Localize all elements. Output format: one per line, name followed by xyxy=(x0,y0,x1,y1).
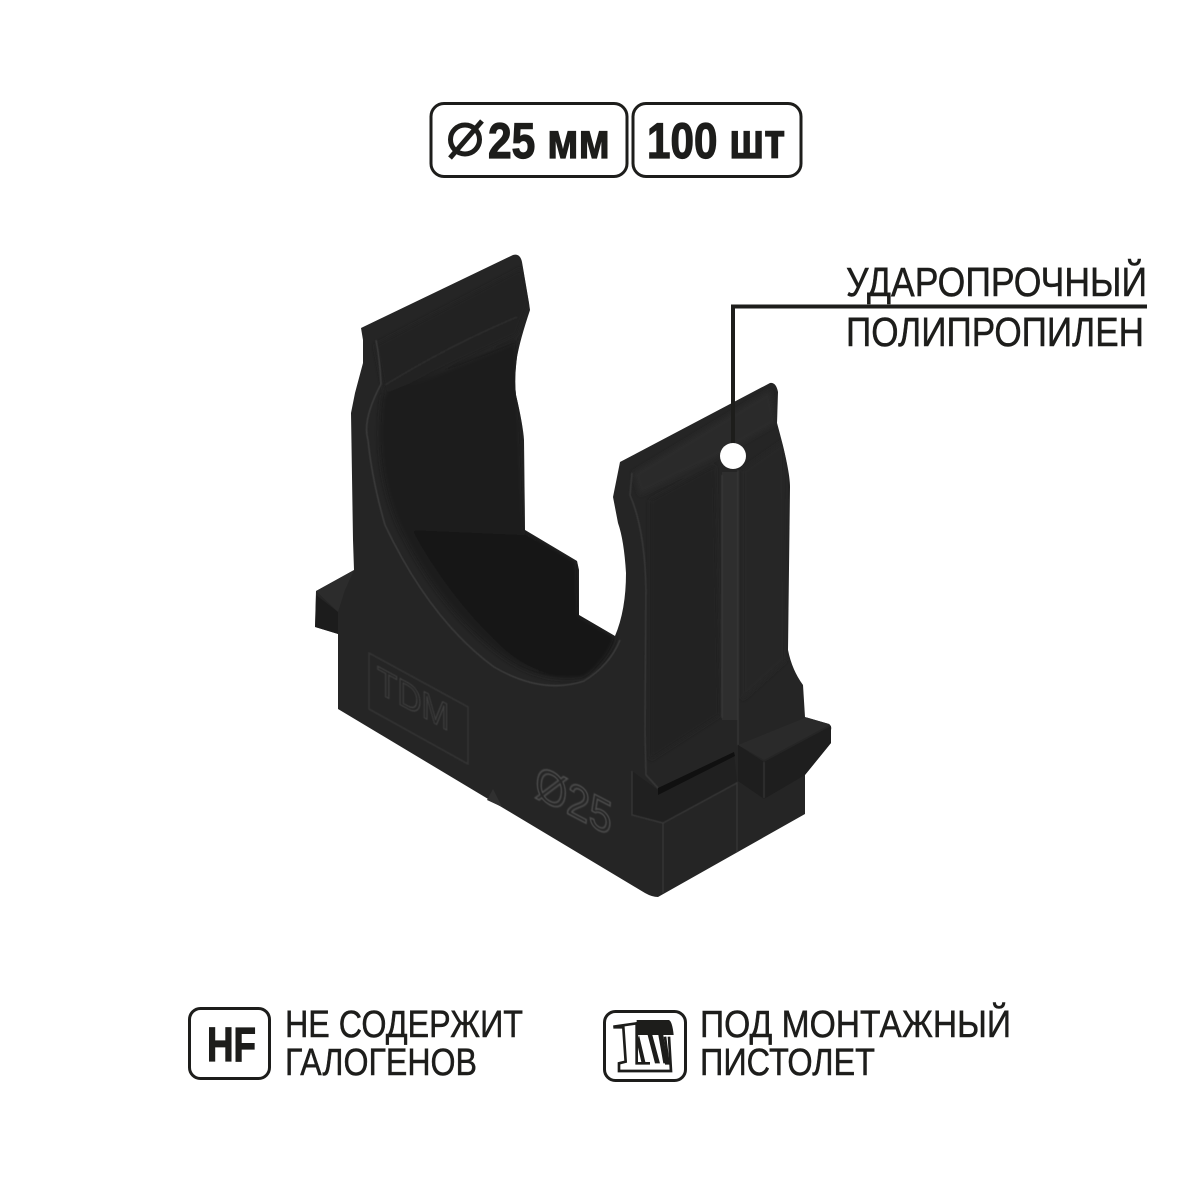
callout text: material: ПОЛИПРОПИЛЕН xyxy=(846,309,1144,355)
embossed frame with TDM logo: TDM xyxy=(377,659,449,740)
badge: 100 pieces xyxy=(633,104,801,176)
embossed frame with TDM logo xyxy=(369,653,468,764)
badge: diameter 25 mm: 25 мм xyxy=(488,113,610,169)
callout text: material xyxy=(846,259,1147,355)
icon: halogen free xyxy=(190,1008,270,1078)
text: for mounting gun: ПИСТОЛЕТ xyxy=(700,1042,875,1084)
icon: halogen free: HF xyxy=(207,1019,256,1072)
callout text: material: УДАРОПРОЧНЫЙ xyxy=(846,259,1147,305)
icon: diameter symbol xyxy=(450,121,482,158)
embossed diameter 25 mark: Ø25 xyxy=(533,754,615,846)
text: no halogens xyxy=(285,1004,523,1084)
badge: diameter 25 mm xyxy=(431,104,627,176)
text: no halogens: НЕ СОДЕРЖИТ xyxy=(285,1004,523,1046)
product: black conduit clip xyxy=(300,240,840,910)
callout: leader line to material xyxy=(720,306,1147,469)
text: for mounting gun xyxy=(700,1001,1011,1084)
icon: mounting gun xyxy=(604,1012,686,1080)
badge: 100 pieces: 100 шт xyxy=(647,113,785,169)
mould nub under the clip xyxy=(487,789,502,807)
callout marker dot xyxy=(720,443,746,469)
text: for mounting gun: ПОД МОНТАЖНЫЙ xyxy=(700,1001,1011,1046)
foot shading xyxy=(315,570,831,893)
text: no halogens: ГАЛОГЕНОВ xyxy=(285,1042,477,1084)
